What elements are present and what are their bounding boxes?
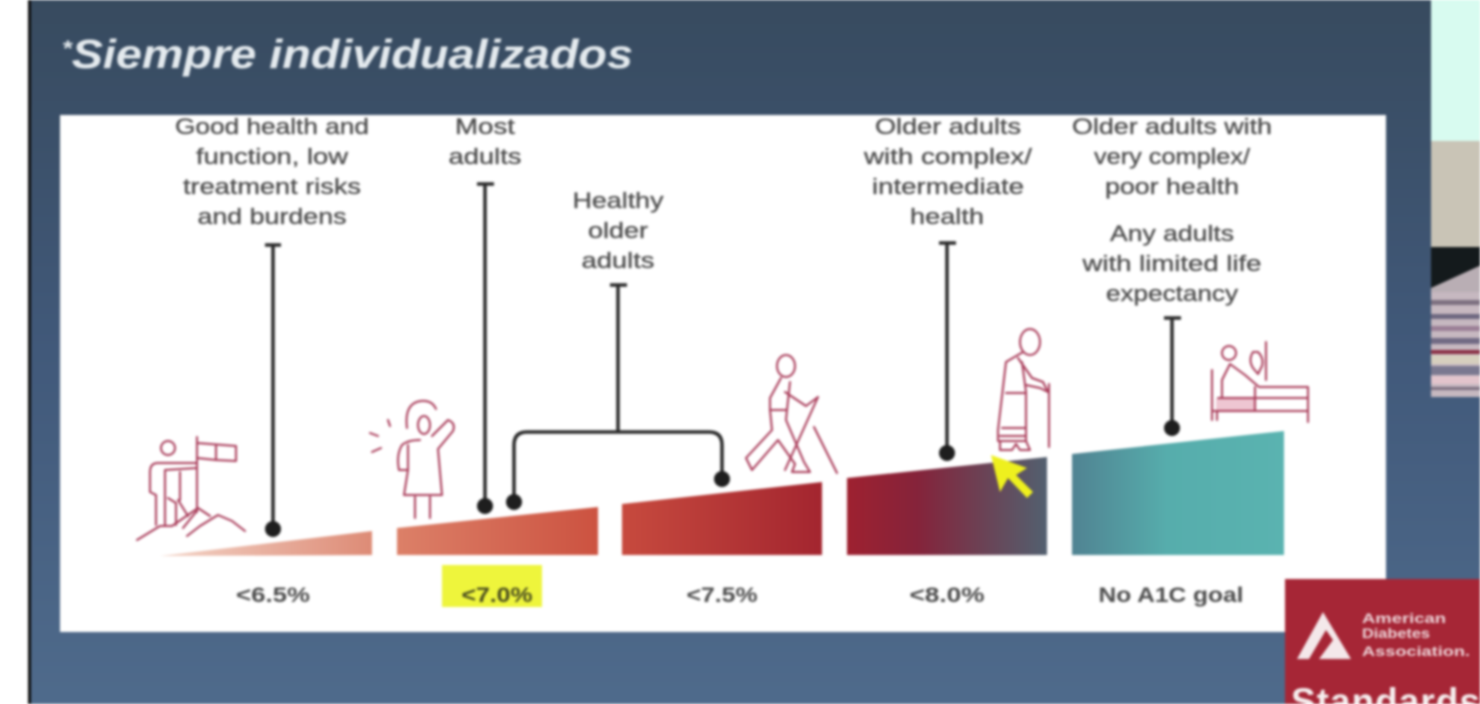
- icon: walker with poles: [746, 355, 837, 473]
- ramp: no goal: [1072, 431, 1284, 555]
- title: Siempre individualizados: [72, 31, 633, 77]
- logo triangle: [1297, 612, 1351, 659]
- label: healthy older adults: [572, 188, 664, 273]
- connector: very complex health: [1164, 318, 1181, 436]
- ramp: under 7.5: [622, 482, 822, 555]
- label: most adults: [448, 114, 522, 169]
- label: good health: function, low: [196, 144, 348, 169]
- association name: Diabetes: [1362, 626, 1430, 641]
- label: complex health: Older adults: [875, 114, 1021, 139]
- label: very complex health: very complex/: [1094, 144, 1251, 169]
- value: no A1C goal: No A1C goal: [1098, 584, 1244, 607]
- label: good health: and burdens: [198, 204, 346, 229]
- label: most adults: adults: [448, 144, 522, 169]
- label: very complex health: Older adults with: [1072, 114, 1272, 139]
- label: limited life expectancy: expectancy: [1106, 281, 1238, 306]
- value: under 7.0: <7.0%: [462, 584, 533, 607]
- white chart panel: [60, 114, 1386, 632]
- label: complex health: with complex/: [863, 144, 1033, 169]
- label: healthy older adults: older: [588, 218, 648, 243]
- highlight: under 7.0: [442, 565, 542, 607]
- label: complex health: health: [910, 204, 984, 229]
- label: limited life expectancy: [1081, 221, 1262, 306]
- icon: hiker with flag: [137, 437, 245, 540]
- connector: most adults: [477, 184, 494, 514]
- label: good health: [175, 114, 369, 229]
- association name: American: [1362, 611, 1446, 626]
- label: healthy older adults: adults: [582, 248, 654, 273]
- value: under 7.5: <7.5%: [686, 584, 758, 607]
- association name: Association.: [1362, 644, 1470, 659]
- icon: hospital bed: [1212, 342, 1308, 422]
- label: good health: Good health and: [175, 114, 369, 139]
- ramp: under 7.0: [397, 507, 598, 555]
- label: good health: treatment risks: [183, 174, 361, 199]
- label: very complex health: [1072, 114, 1272, 199]
- label: complex health: intermediate: [872, 174, 1024, 199]
- label: complex health: [863, 114, 1033, 229]
- icon: waving woman: [370, 401, 454, 518]
- value: under 8.0: <8.0%: [910, 584, 985, 607]
- connector: healthy older adults bracket: [506, 285, 730, 510]
- ramp: under 8.0: [847, 457, 1047, 555]
- title: *: [62, 36, 73, 61]
- label: limited life expectancy: Any adults: [1110, 221, 1234, 246]
- label: limited life expectancy: with limited life: [1081, 251, 1262, 276]
- side photo strip: [1431, 0, 1480, 397]
- icon: older woman with cane: [998, 329, 1049, 450]
- label: very complex health: poor health: [1105, 174, 1239, 199]
- badge: American Diabetes Association: [1285, 579, 1480, 704]
- label: most adults: Most: [455, 114, 515, 139]
- mouse cursor: [991, 455, 1033, 498]
- value: under 6.5: <6.5%: [236, 584, 310, 607]
- ramp: under 6.5: [160, 531, 372, 556]
- connector: good health: [265, 245, 281, 537]
- association name: [1362, 611, 1470, 659]
- connector: complex health: [939, 243, 956, 461]
- label: healthy older adults: Healthy: [572, 188, 664, 213]
